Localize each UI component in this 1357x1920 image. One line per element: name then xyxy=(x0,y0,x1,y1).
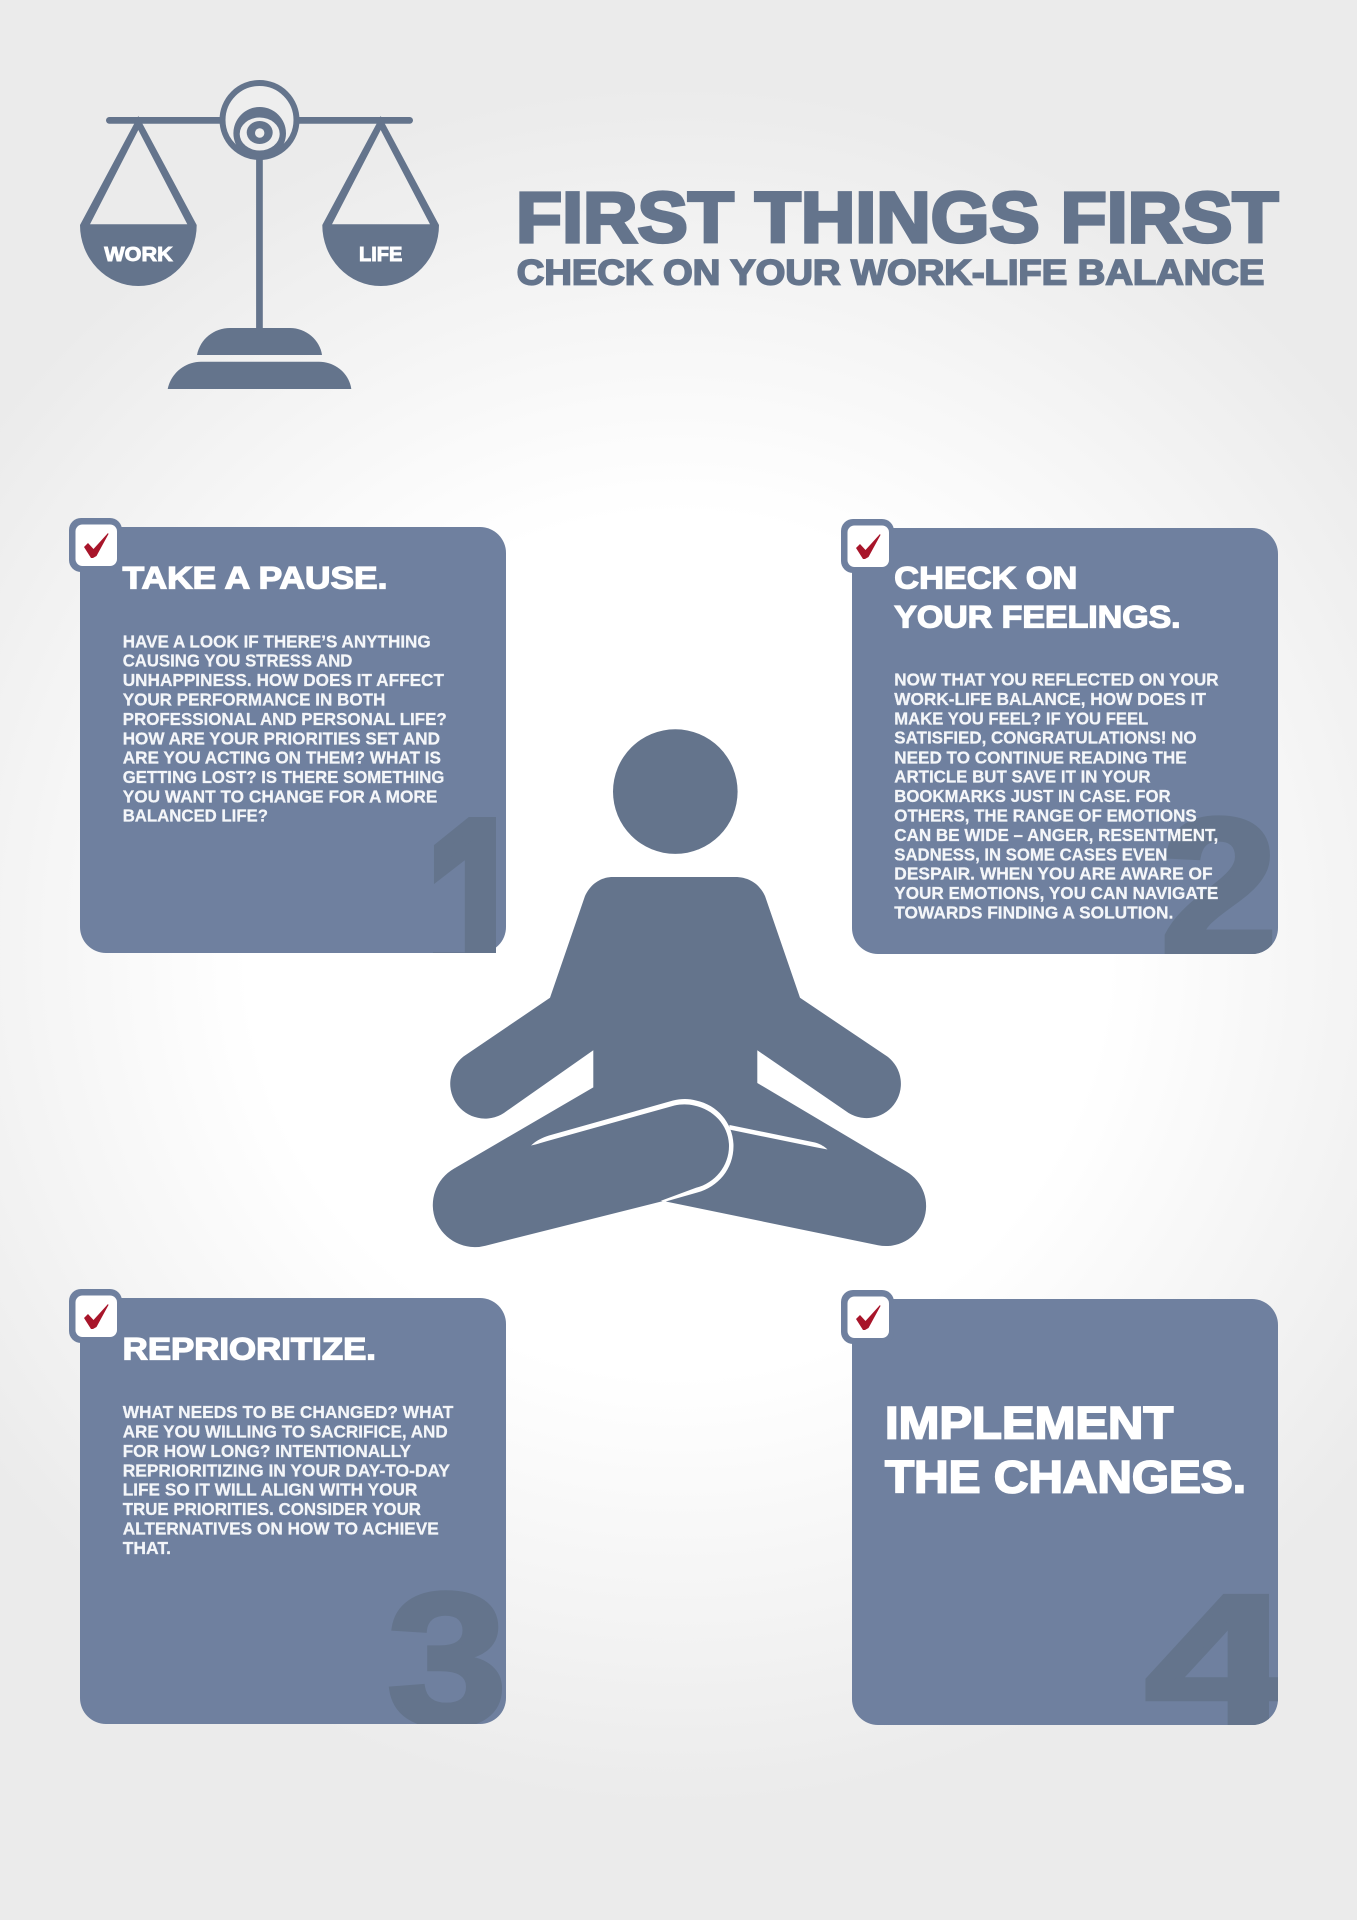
number 2: 2 xyxy=(1160,778,1278,996)
checkbox xyxy=(69,518,122,572)
body text: MAKE YOU FEEL? IF YOU FEEL xyxy=(894,708,1149,728)
body text: CAUSING YOU STRESS AND xyxy=(123,651,352,671)
heading: REPRIORITIZE. xyxy=(123,1330,376,1366)
body text: TRUE PRIORITIES. CONSIDER YOUR xyxy=(123,1499,421,1519)
checkbox xyxy=(841,1290,894,1344)
heading: YOUR FEELINGS. xyxy=(894,598,1181,634)
panel: reprioritize xyxy=(69,1289,507,1764)
panel: check on your feelings xyxy=(841,519,1278,996)
heading: IMPLEMENT xyxy=(885,1398,1174,1449)
title: FIRST THINGS FIRST xyxy=(516,178,1278,258)
body text: BALANCED LIFE? xyxy=(123,806,268,826)
front leg xyxy=(433,1102,733,1247)
subtitle: CHECK ON YOUR WORK-LIFE BALANCE xyxy=(517,252,1264,292)
heading: CHECK ON xyxy=(894,559,1077,595)
checkbox xyxy=(69,1289,122,1343)
body text: ARTICLE BUT SAVE IT IN YOUR xyxy=(894,767,1151,787)
panel: take a pause xyxy=(69,518,506,953)
body text: REPRIORITIZING IN YOUR DAY-TO-DAY xyxy=(123,1460,450,1480)
panel: implement the changes xyxy=(841,1290,1278,1725)
body text: HAVE A LOOK IF THERE’S ANYTHING xyxy=(123,631,431,651)
body text: OTHERS, THE RANGE OF EMOTIONS xyxy=(894,805,1197,825)
body text: NEED TO CONTINUE READING THE xyxy=(894,747,1187,767)
icon: meditating figure xyxy=(433,729,926,1247)
body text: FOR HOW LONG? INTENTIONALLY xyxy=(123,1441,411,1461)
body text: NOW THAT YOU REFLECTED ON YOUR xyxy=(894,670,1219,690)
body text: YOUR PERFORMANCE IN BOTH xyxy=(123,689,385,709)
body text: UNHAPPINESS. HOW DOES IT AFFECT xyxy=(123,670,444,690)
icon: balance scale xyxy=(80,83,439,389)
body text: ALTERNATIVES ON HOW TO ACHIEVE xyxy=(123,1519,439,1539)
body text xyxy=(894,670,1219,922)
heading: TAKE A PAUSE. xyxy=(123,559,387,595)
number 4: 4 xyxy=(1145,1556,1291,1765)
body text: BOOKMARKS JUST IN CASE. FOR xyxy=(894,786,1171,806)
body text: WORK-LIFE BALANCE, HOW DOES IT xyxy=(894,689,1206,709)
white leg outlines xyxy=(531,1099,828,1202)
label: work: WORK xyxy=(104,244,173,266)
heading: THE CHANGES. xyxy=(885,1452,1246,1503)
label: life: LIFE xyxy=(359,244,402,266)
heading xyxy=(885,1398,1246,1503)
body text xyxy=(123,1402,454,1558)
body text: TOWARDS FINDING A SOLUTION. xyxy=(894,902,1173,922)
body text: LIFE SO IT WILL ALIGN WITH YOUR xyxy=(123,1480,418,1500)
body text xyxy=(123,631,447,826)
body text: ARE YOU ACTING ON THEM? WHAT IS xyxy=(123,748,441,768)
body text: CAN BE WIDE – ANGER, RESENTMENT, xyxy=(894,825,1218,845)
body text: SADNESS, IN SOME CASES EVEN xyxy=(894,844,1167,864)
body text: DESPAIR. WHEN YOU ARE AWARE OF xyxy=(894,864,1213,884)
checkbox xyxy=(841,519,894,573)
body text: ARE YOU WILLING TO SACRIFICE, AND xyxy=(123,1422,448,1442)
heading xyxy=(894,559,1181,634)
body, arms and back leg silhouette xyxy=(450,877,926,1246)
body text: THAT. xyxy=(123,1538,171,1558)
body text: HOW ARE YOUR PRIORITIES SET AND xyxy=(123,728,440,748)
body text: WHAT NEEDS TO BE CHANGED? WHAT xyxy=(123,1402,454,1422)
body text: PROFESSIONAL AND PERSONAL LIFE? xyxy=(123,709,447,729)
body text: YOUR EMOTIONS, YOU CAN NAVIGATE xyxy=(894,883,1218,903)
body text: YOU WANT TO CHANGE FOR A MORE xyxy=(123,786,437,806)
body text: SATISFIED, CONGRATULATIONS! NO xyxy=(894,728,1197,748)
body text: GETTING LOST? IS THERE SOMETHING xyxy=(123,767,444,787)
number 1: 1 xyxy=(426,773,530,1032)
number 3: 3 xyxy=(387,1554,507,1764)
